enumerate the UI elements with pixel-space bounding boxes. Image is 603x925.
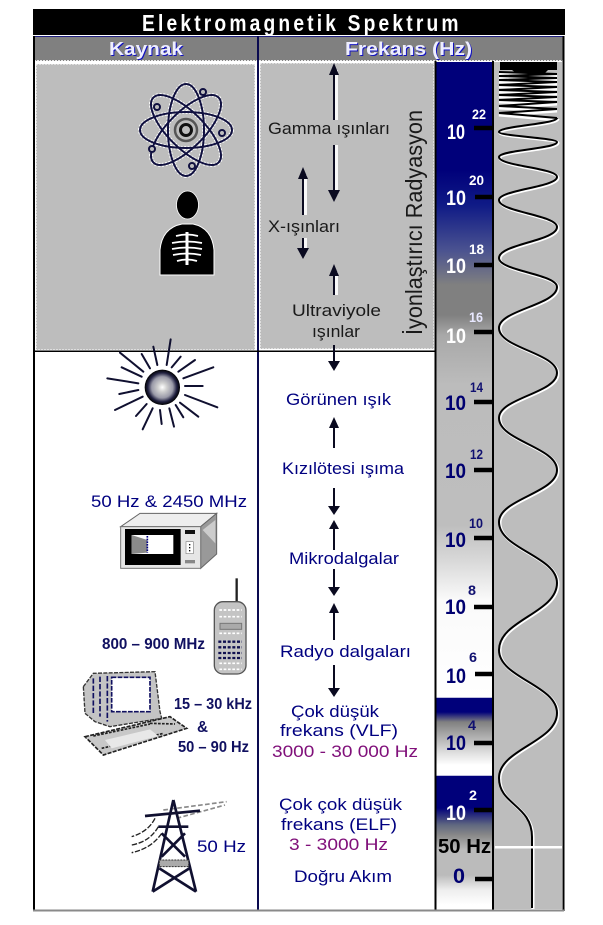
icon: mobile phone	[214, 578, 246, 674]
frequency scale labels: 10	[446, 802, 466, 825]
frequency scale labels: 20	[469, 172, 484, 188]
icon: sun	[107, 339, 217, 429]
frequency scale labels: 10	[446, 255, 466, 278]
title bar	[33, 9, 565, 36]
title bar: Elektromagnetik Spektrum	[142, 10, 459, 36]
frequency scale labels: 50 Hz	[438, 835, 491, 858]
frequency scale labels: 6	[469, 649, 477, 665]
frequency scale labels: 10	[446, 665, 466, 688]
band labels: ionizing	[268, 119, 390, 341]
band labels: ionizing: ışınlar	[312, 322, 360, 341]
frequency scale labels: 22	[472, 106, 486, 122]
vertical label: ionizing radiation: İyonlaştırıcı Radyasyon	[401, 110, 427, 335]
band labels: non-ionizing: Radyo dalgaları	[280, 643, 411, 661]
band labels: non-ionizing: Kızılötesi ışıma	[282, 460, 405, 478]
frequency ticks	[474, 128, 492, 879]
heading: Kaynak: Kaynak	[110, 39, 185, 60]
frequency scale labels: 10	[445, 460, 466, 483]
source label: computer frequencies: 50 – 90 Hz	[178, 739, 249, 756]
frequency scale labels: 10	[446, 732, 466, 755]
band labels: non-ionizing: frekans (VLF)	[280, 722, 398, 740]
frequency scale column	[436, 62, 492, 909]
frequency scale labels: 4	[468, 717, 476, 733]
frequency scale labels: 10	[445, 529, 466, 552]
frequency scale labels: 10	[445, 596, 466, 619]
band labels: non-ionizing: Çok çok düşük	[279, 796, 403, 814]
band labels: non-ionizing: Çok düşük	[291, 703, 380, 721]
frequency scale labels: 8	[468, 582, 476, 598]
icon: power line tower	[132, 800, 227, 892]
frequency scale labels	[438, 106, 491, 888]
icon: atom	[140, 84, 232, 176]
50 Hz marker line	[495, 846, 562, 848]
panel: ionizing radiation, source side	[36, 64, 255, 350]
frequency ranges	[272, 743, 418, 854]
icon: computer	[83, 672, 187, 755]
frequency scale labels: 10	[469, 515, 483, 531]
source label: microwave frequency: 50 Hz & 2450 MHz	[91, 493, 247, 511]
band labels: non-ionizing: frekans (ELF)	[281, 816, 397, 834]
band labels: non-ionizing: Doğru Akım	[294, 868, 392, 886]
source label: power line frequency: 50 Hz	[197, 838, 246, 856]
frequency scale labels: 18	[469, 241, 484, 257]
band labels: ionizing: Gamma ışınları	[268, 119, 390, 138]
source label: computer frequencies: 15 – 30 kHz	[174, 696, 252, 713]
icon: x-ray person	[160, 191, 214, 275]
source label: computer frequencies: &	[197, 719, 208, 736]
frequency scale labels: 2	[469, 787, 477, 803]
frequency scale labels: 10	[445, 392, 466, 415]
frequency ranges: 3000 - 30 000 Hz	[272, 743, 418, 761]
wave: frequency decreasing downward	[499, 62, 558, 909]
source label: phone frequency: 800 – 900 MHz	[102, 636, 205, 653]
band labels: non-ionizing	[279, 391, 411, 886]
panel: ionizing radiation, label side	[260, 63, 434, 349]
source label: computer frequencies	[174, 696, 252, 756]
frequency scale labels: 16	[469, 309, 483, 325]
band labels: ionizing: X-ışınları	[268, 217, 340, 236]
arrows between bands	[297, 63, 340, 697]
header row	[34, 36, 563, 61]
frequency scale labels: 0	[453, 865, 465, 888]
frequency scale labels: 10	[446, 187, 466, 210]
frequency scale labels: 10	[447, 121, 465, 144]
frequency ranges: 3 - 3000 Hz	[289, 836, 388, 854]
heading: Frekans (Hz): Frekans (Hz)	[345, 38, 472, 59]
heading: Kaynak: Kaynak	[109, 38, 184, 59]
icon: microwave oven	[121, 513, 217, 568]
band labels: non-ionizing: Görünen ışık	[286, 391, 392, 409]
band labels: non-ionizing: Mikrodalgalar	[289, 550, 400, 568]
frequency scale labels: 12	[470, 446, 483, 462]
heading: Frekans (Hz): Frekans (Hz)	[346, 39, 473, 60]
band labels: ionizing: Ultraviyole	[292, 301, 381, 320]
frequency scale labels: 10	[446, 325, 466, 348]
frequency scale labels: 14	[470, 379, 483, 395]
wave column background	[494, 62, 562, 909]
